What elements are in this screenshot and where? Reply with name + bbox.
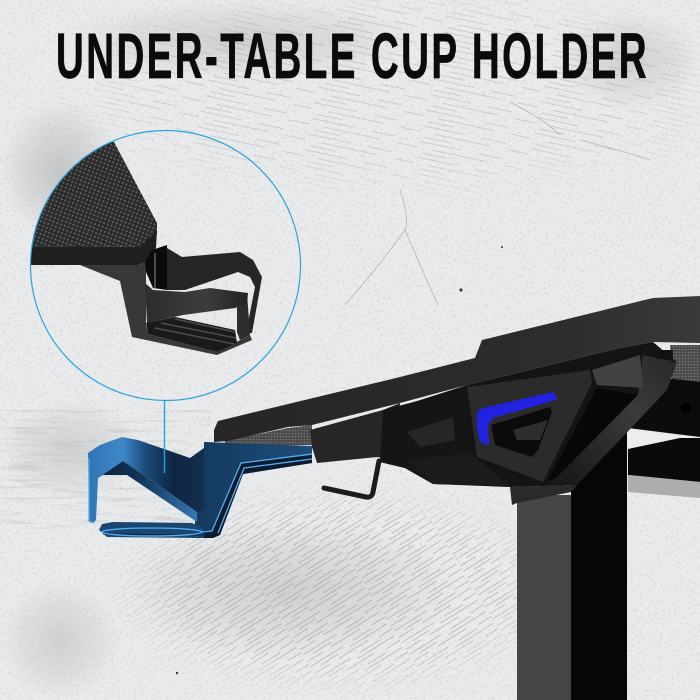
holder right strut: [237, 299, 250, 340]
desk underside carbon strip: [225, 425, 312, 446]
holder dark fins: [192, 455, 312, 538]
housing dark recess: [547, 388, 638, 482]
housing shadow base: [380, 342, 677, 487]
holder base stripes: [103, 534, 203, 535]
holder post: [145, 245, 167, 290]
holder arm: [88, 437, 204, 523]
magnifier inset: cup holder close-up: [20, 130, 300, 400]
holder front band: [145, 283, 248, 323]
lower crossbar grey strip: [628, 475, 700, 498]
blue light strip: [477, 392, 557, 445]
housing front face: [467, 370, 592, 482]
holder post highlight: [154, 253, 156, 288]
leg left face: [517, 495, 571, 700]
holder base: [99, 522, 204, 538]
housing right upper facet: [592, 355, 643, 388]
leg: [510, 430, 627, 700]
housing left lobe: [310, 403, 400, 463]
housing outer strut: [547, 355, 677, 485]
right underside carbon: [670, 345, 700, 385]
main housing: [310, 342, 677, 487]
grille inner: [513, 420, 548, 440]
ribbed base: [146, 317, 237, 352]
desk assembly: [214, 296, 700, 700]
housing dark left section: [380, 388, 510, 486]
housing lower facet: [407, 453, 510, 486]
leg collar: [510, 485, 577, 505]
blue holder highlight: [88, 437, 312, 538]
holder blue lines: [89, 454, 312, 536]
desk front edge: [20, 230, 157, 265]
crossbar dark: [628, 375, 700, 437]
holder body: [195, 442, 312, 538]
desk top slab: [214, 296, 700, 442]
lower crossbar: [628, 438, 700, 482]
leg right face: [571, 430, 627, 700]
inset ring: [30, 130, 300, 400]
holder back loop: [167, 248, 262, 333]
white gap: [628, 430, 700, 449]
inset desk and holder: [20, 142, 262, 355]
bracket body: [80, 262, 252, 355]
desk hole: [681, 403, 691, 413]
desk carbon top: [20, 142, 157, 247]
metal hook: [324, 461, 379, 497]
connector line: [164, 400, 166, 473]
housing grille: [491, 407, 552, 457]
housing left panel: [407, 417, 455, 447]
housing pin: [657, 350, 673, 359]
holder under band: [98, 461, 197, 522]
